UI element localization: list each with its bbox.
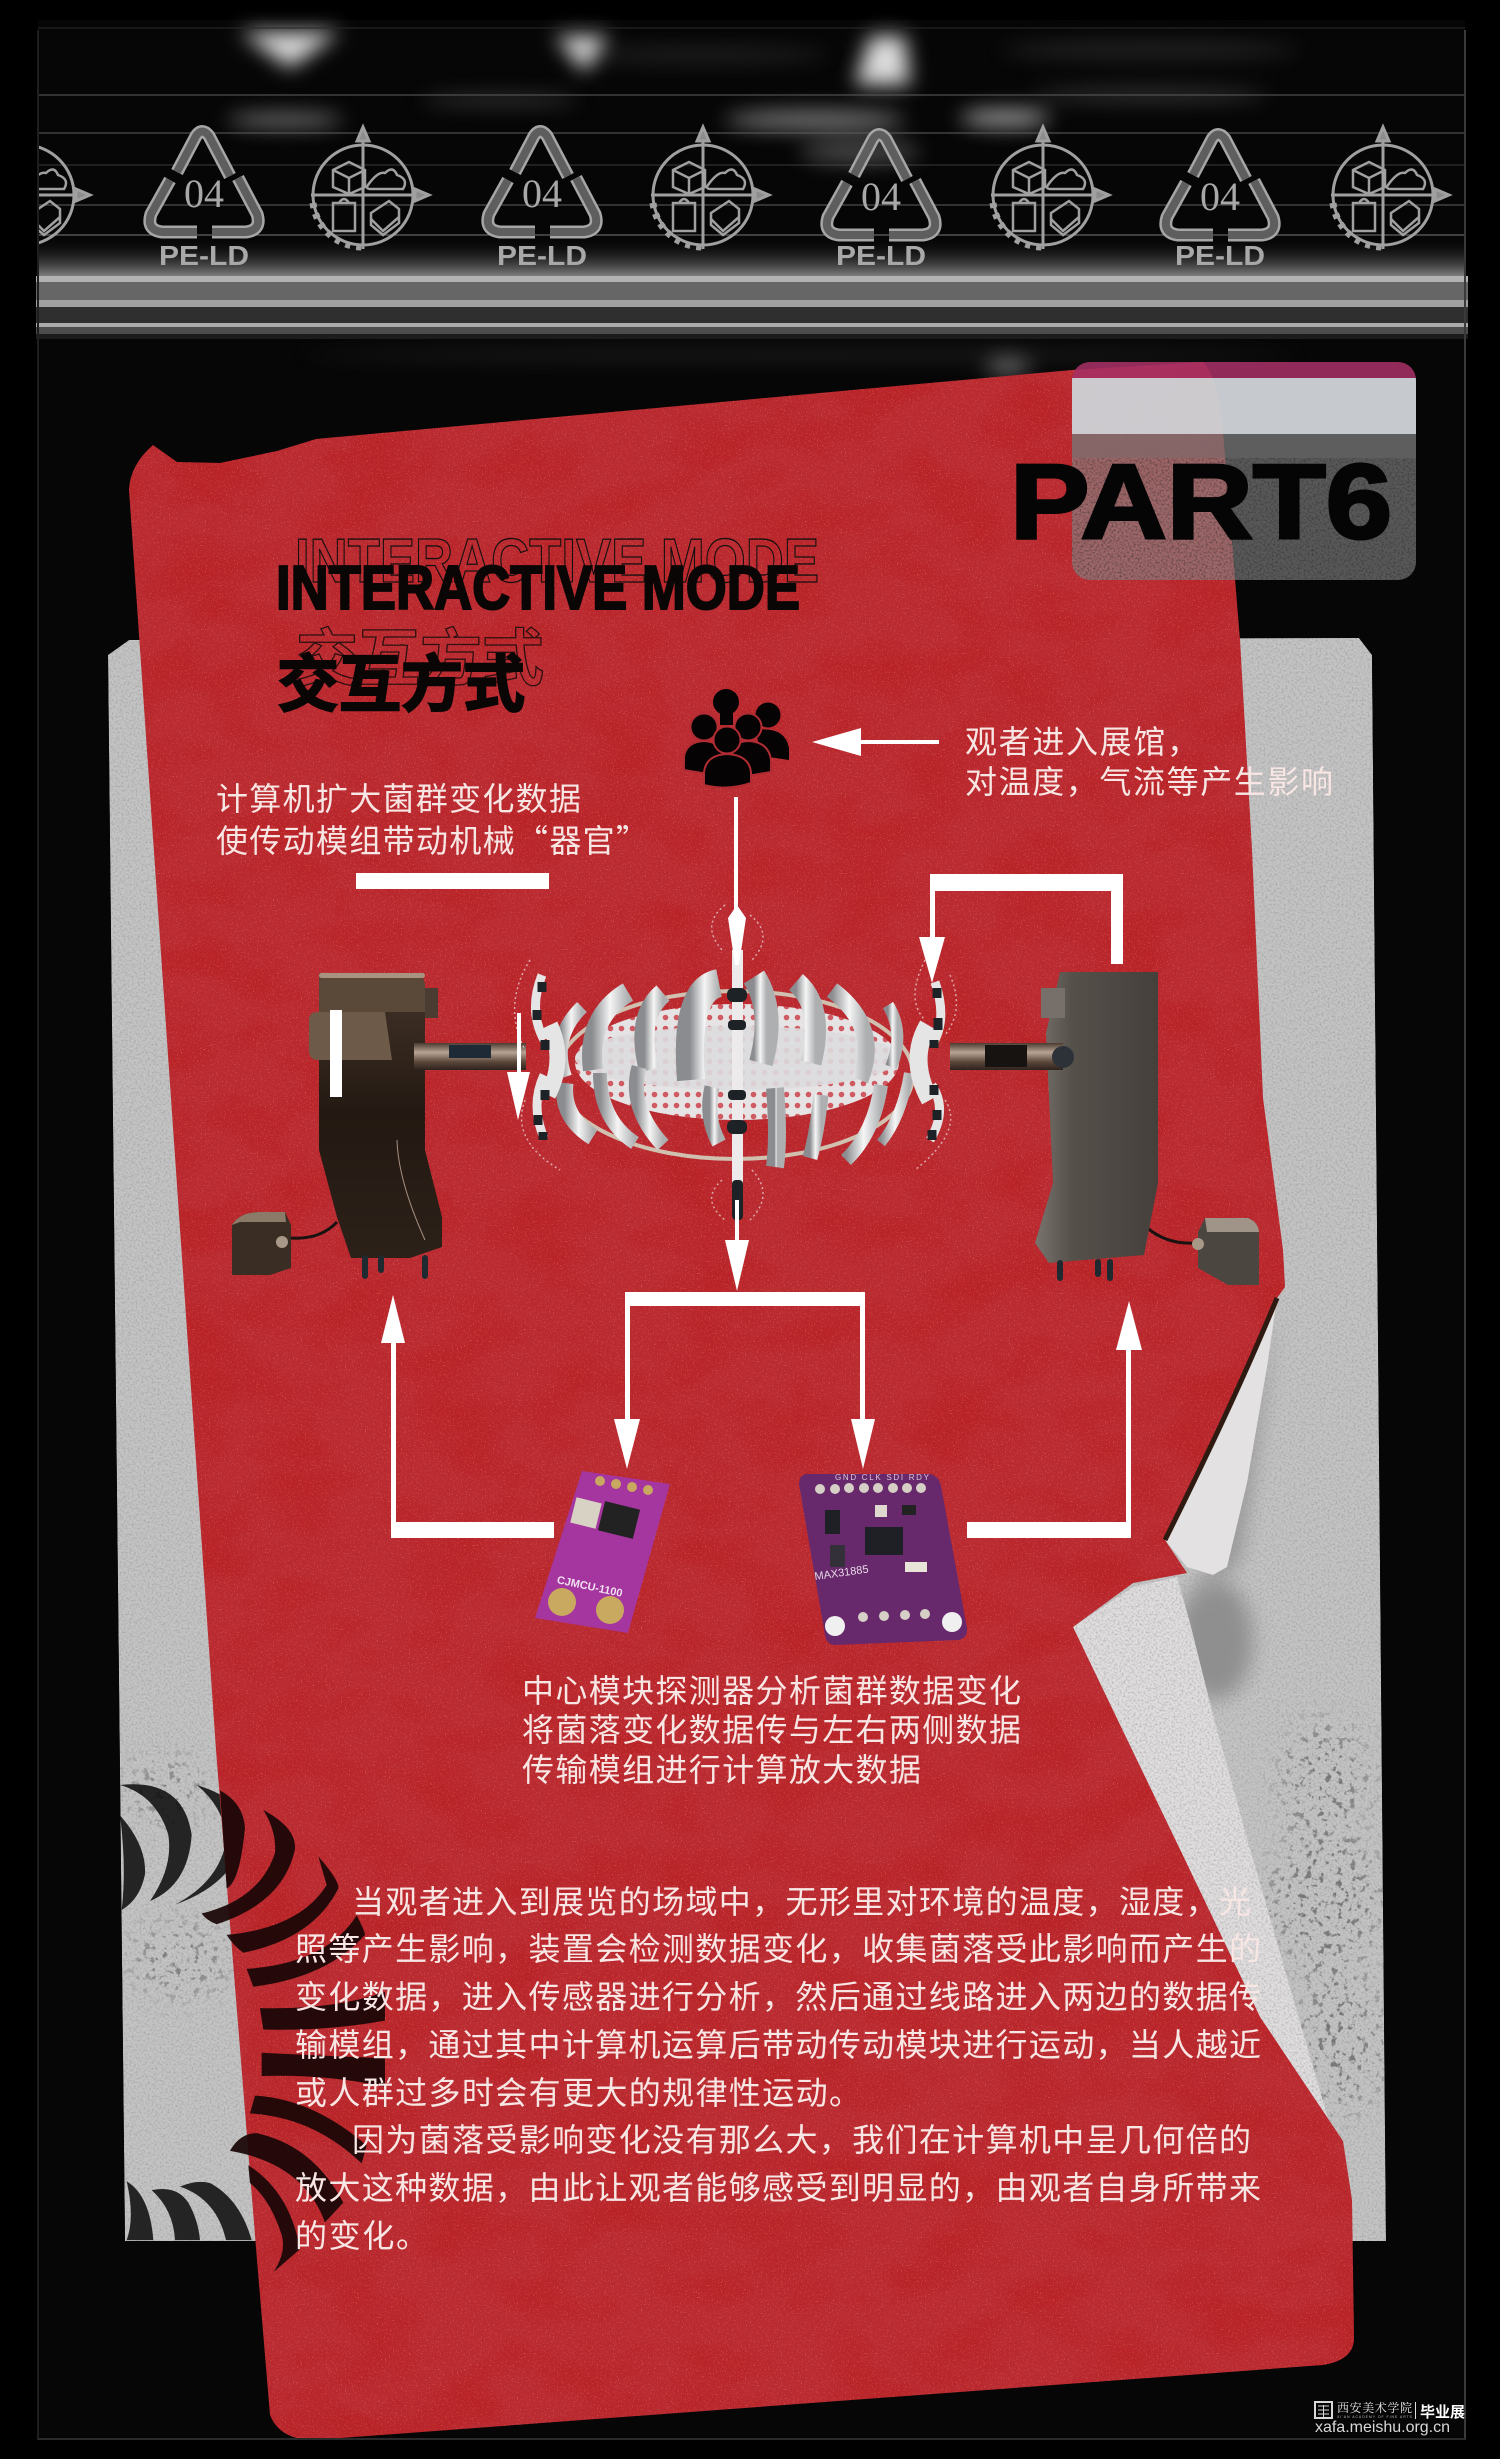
text block: computer amplifies data: 使传动模组带动机械“器官” — [216, 816, 648, 862]
heading: INTERACTIVE MODE — [276, 527, 819, 623]
logo: Xi'an Academy of Fine Arts graduation exhibition: xafa.meishu.org.cn — [1315, 2419, 1450, 2436]
text block: computer amplifies data: 计算机扩大菌群变化数据 — [216, 781, 581, 817]
icon: right sensor board MAX31885 — [799, 1473, 967, 1645]
icon: recycling mark 04 PE-LD four: PE-LD — [1175, 240, 1265, 271]
arrow: left bar under caption — [356, 873, 549, 889]
machine: left housing — [291, 973, 442, 1276]
arrow: from label into crowd — [812, 728, 939, 756]
text block: computer amplifies data — [216, 781, 648, 862]
logo: Xi'an Academy of Fine Arts graduation exhibition: 毕业展 — [1420, 2404, 1465, 2421]
heading: 交互方式 — [277, 625, 544, 720]
icon: recycling mark 04 PE-LD four: 04 — [1200, 174, 1240, 219]
icon: recycling mark 04 PE-LD two — [488, 132, 596, 271]
text block: centre module explanation: 传输模组进行计算放大数据 — [522, 1752, 921, 1788]
icon: recycling mark 04 PE-LD three: 04 — [861, 174, 901, 219]
icon: certification mark two — [651, 127, 769, 249]
panel: swirling black stripes on the red paper — [202, 1790, 385, 2272]
icon: left sensor board CJMCU-1100: CJMCU-1100 — [556, 1574, 623, 1600]
panel: translucent colour blocks behind PART6 — [1072, 362, 1416, 580]
text block: visitors enter the hall: 观者进入展馆， — [965, 724, 1199, 760]
icon: recycling mark 04 PE-LD one: 04 — [184, 171, 224, 216]
machine: central mesh organ — [557, 977, 913, 1167]
heading: 交互方式: 交互方式 — [277, 651, 525, 720]
heading: INTERACTIVE MODE: INTERACTIVE MODE — [276, 554, 800, 623]
arrow: splitter to two sensor boards — [614, 1292, 875, 1469]
machine: right joint arm — [915, 960, 956, 1170]
icon: certification mark three — [991, 127, 1109, 249]
heading: PART6: PART6 — [1010, 443, 1392, 561]
text block: main paragraph: 放大这种数据，由此让观者能够感受到明显的，由观者自身所带来 — [295, 2170, 1261, 2206]
panel: red torn paper — [120, 360, 1370, 2450]
icon: certification mark four — [1331, 127, 1449, 249]
diagram: mechanical organ machine — [232, 905, 1259, 1285]
icon: right sensor board MAX31885: MAX31885 — [814, 1564, 869, 1583]
panel: torn white paper flaps — [1073, 1308, 1328, 2118]
icon: recycling mark 04 PE-LD one — [150, 132, 258, 271]
arrow: right sensor return to right housing — [967, 1301, 1142, 1538]
icon: left-clipped certification mark — [39, 146, 94, 244]
panel: plastic bag header highlights — [38, 28, 1465, 376]
logo: Xi'an Academy of Fine Arts graduation exhibition — [1315, 2399, 1465, 2436]
panel: grey card behind the red paper — [100, 630, 1400, 2260]
machine: right sensor box — [1192, 1218, 1259, 1285]
icon: right sensor board MAX31885: GND CLK SDI RDY — [835, 1473, 930, 1482]
text block: centre module explanation: 中心模块探测器分析菌群数据变化 — [522, 1673, 1021, 1709]
icon: left sensor board CJMCU-1100 — [535, 1471, 670, 1633]
panel: swirling black stripes on the grey card — [120, 1784, 252, 2240]
icon: recycling mark 04 PE-LD three: PE-LD — [836, 240, 926, 271]
text block: main paragraph: 变化数据，进入传感器进行分析，然后通过线路进入两边的数据传 — [295, 1979, 1261, 2015]
text block: visitors enter the hall: 对温度，气流等产生影响 — [965, 764, 1333, 800]
arrow: crowd down through machine to sensors — [725, 797, 749, 1291]
text block: main paragraph: 或人群过多时会有更大的规律性运动。 — [295, 2075, 861, 2111]
text block: main paragraph: 因为菌落受影响变化没有那么大，我们在计算机中呈几何倍的 — [352, 2122, 1251, 2158]
machine: right shaft — [950, 1043, 1074, 1070]
machine: left sensor box — [232, 1212, 291, 1275]
machine: vibration ticks on spine — [712, 905, 763, 1220]
arrow: left vertical bar on housing — [330, 1010, 342, 1097]
heading: INTERACTIVE MODE: INTERACTIVE MODE — [295, 527, 819, 596]
icon: recycling mark 04 PE-LD two: PE-LD — [497, 240, 587, 271]
arrow: left drop into joint — [507, 1013, 530, 1120]
text block: main paragraph: 照等产生影响，装置会检测数据变化，收集菌落受此影响而产生的 — [295, 1931, 1261, 1967]
heading: 交互方式: 交互方式 — [296, 625, 544, 694]
icon: recycling mark 04 PE-LD three — [827, 134, 935, 271]
text block: main paragraph: 输模组，通过其中计算机运算后带动传动模块进行运动，当人越近 — [295, 2027, 1261, 2063]
text block: centre module explanation — [522, 1673, 1021, 1788]
arrow: right housing bracket into joint — [919, 874, 1123, 983]
text block: main paragraph — [295, 1884, 1261, 2254]
machine: right housing — [1035, 972, 1196, 1278]
text block: visitors enter the hall — [965, 724, 1333, 800]
text block: main paragraph: 当观者进入到展览的场域中，无形里对环境的温度，湿度，光 — [352, 1884, 1251, 1920]
panel: zip seal band — [36, 276, 1468, 339]
arrow: left sensor return to left housing — [381, 1295, 554, 1538]
machine: central vertical spine — [727, 950, 747, 1220]
icon: recycling mark 04 PE-LD four — [1166, 134, 1274, 271]
icon: recycling mark 04 PE-LD two: 04 — [522, 171, 562, 216]
icon: certification mark one — [311, 127, 429, 249]
icon: recycling mark 04 PE-LD one: PE-LD — [159, 240, 249, 271]
text block: main paragraph: 的变化。 — [295, 2218, 428, 2254]
logo: Xi'an Academy of Fine Arts graduation exhibition: 西安美术学院 — [1337, 2399, 1412, 2416]
machine: left joint arm — [515, 960, 560, 1170]
text block: centre module explanation: 将菌落变化数据传与左右两侧数据 — [522, 1712, 1021, 1748]
machine: left shaft — [414, 1043, 526, 1070]
icon: crowd of people — [684, 689, 789, 788]
logo: Xi'an Academy of Fine Arts graduation exhibition: XI'AN ACADEMY OF FINE ARTS — [1337, 2415, 1413, 2419]
